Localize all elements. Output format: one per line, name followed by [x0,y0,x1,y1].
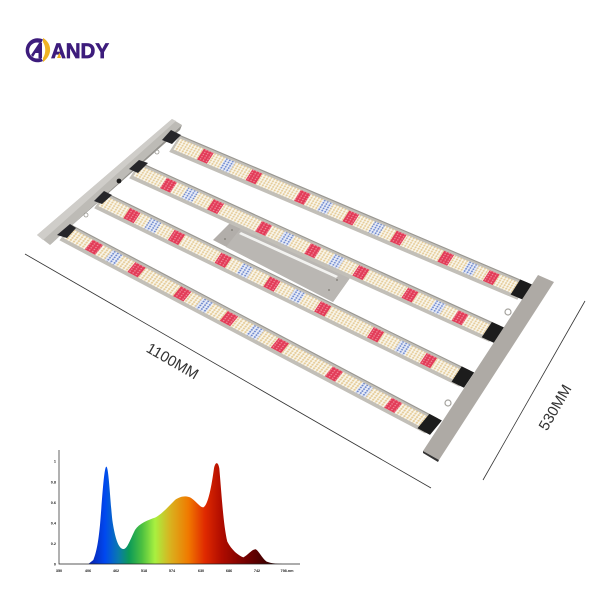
icon: logo gold crescent [43,38,50,62]
x axis labels: 798.nm [280,569,294,573]
x axis labels [56,569,294,573]
dimension label: 530MM: 530MM [536,382,575,434]
x axis labels: 630 [198,569,204,573]
y axis labels [51,460,57,566]
x axis labels: 406 [85,569,91,573]
axes [59,450,300,564]
x axis labels: 462 [113,569,119,573]
left end bar [37,119,182,245]
dimension label: 1100MM: 1100MM [143,340,201,383]
y axis labels: 0.8 [51,480,56,484]
light strip 4 [59,225,442,436]
y axis labels: 0.6 [51,501,56,505]
icon: gold notch in A [57,52,61,58]
y axis labels: 0.2 [51,542,56,546]
logo: Andy [26,38,109,63]
icon: hook lower [84,213,88,217]
light strip 3 [94,192,474,389]
right end bar [423,275,554,462]
x axis labels: 574 [169,569,176,573]
icon: logo inner letter [31,43,42,58]
x axis labels: 350 [56,569,62,573]
icon: clip on strip 1 [162,130,181,144]
icon: clip on strip 4 [57,224,76,238]
y axis labels: 1 [54,460,56,464]
icon: ring lower right [445,400,451,406]
dimension line: width [25,254,431,488]
x axis labels: 686 [226,569,232,573]
icon: clip on strip 2 [129,160,148,173]
x axis labels: 518 [141,569,147,573]
icon: clip on strip 3 [94,191,112,204]
light strip 2 [129,162,504,344]
icon: logo ring [26,38,43,62]
icon: hook upper [155,150,159,154]
icon: black knob [117,179,121,183]
dimension line: depth [483,301,585,480]
icon: ring upper right [505,309,511,315]
y axis labels: 0 [54,562,56,566]
x axis labels: 742 [254,569,260,573]
mounting plate [213,223,350,302]
light strip 1 [169,135,532,301]
y axis labels: 0.4 [51,522,57,526]
logo wordmark: ANDY [51,40,109,63]
spectrum curve [88,463,285,564]
spectrum chart [51,450,300,573]
